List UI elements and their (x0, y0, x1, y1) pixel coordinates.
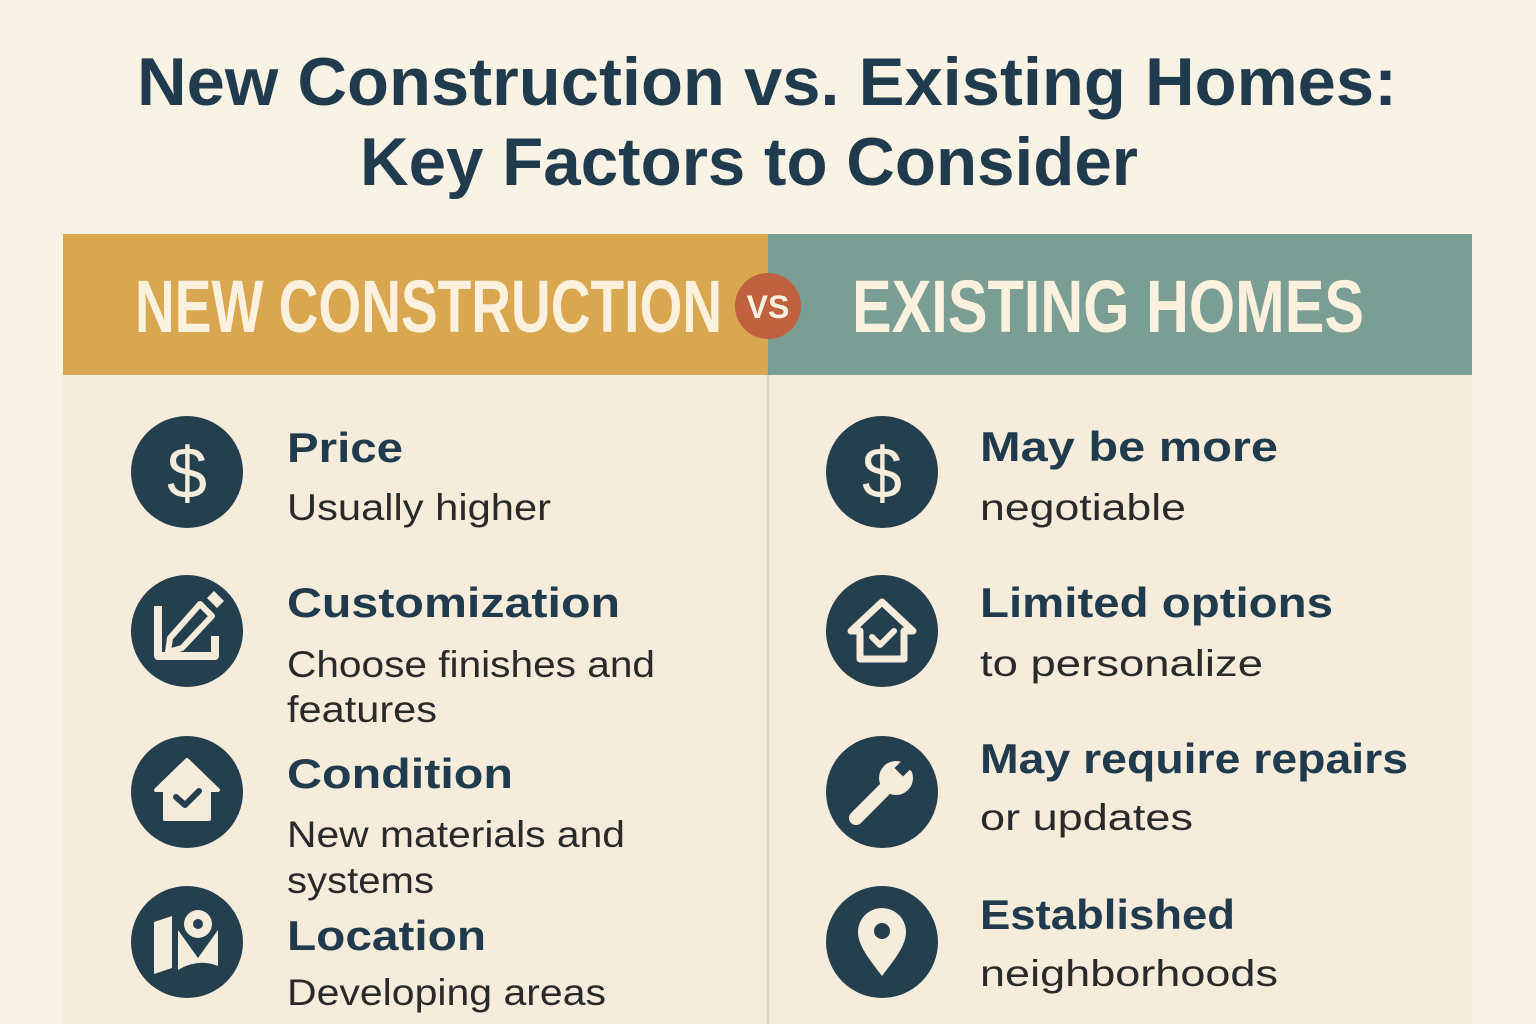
vs badge: VS (747, 289, 789, 325)
item: price: Usually higher (287, 487, 551, 528)
icon: wrench (826, 736, 938, 848)
header: existing homes (768, 234, 1472, 375)
item: location: Location (287, 912, 486, 959)
header: new construction (63, 234, 768, 375)
item: limited options (980, 579, 1333, 684)
icon: dollar left (131, 416, 243, 528)
title (137, 44, 1397, 200)
item: limited options: to personalize (980, 643, 1263, 684)
item: price: Price (287, 424, 403, 471)
item: condition (287, 750, 625, 901)
icon: edit (131, 575, 243, 687)
icon: map (131, 886, 243, 998)
header: existing homes: EXISTING HOMES (852, 265, 1364, 348)
item: repairs: May require repairs (980, 735, 1408, 782)
icon: house check left (131, 736, 243, 848)
item: condition: Condition (287, 750, 513, 797)
item: neighborhoods: neighborhoods (980, 953, 1278, 994)
item: repairs: or updates (980, 797, 1193, 838)
item: neighborhoods: Established (980, 891, 1235, 938)
item: negotiable: May be more (980, 423, 1278, 470)
icon: pin (826, 886, 938, 998)
panel: comparison body (63, 375, 1472, 1024)
icon: dollar right: $ (862, 434, 902, 514)
title: Key Factors to Consider (360, 124, 1138, 200)
item: customization: Choose finishes and (287, 644, 655, 685)
icon: house check right (826, 575, 938, 687)
item: price (287, 424, 551, 528)
title: New Construction vs. Existing Homes: (137, 44, 1397, 120)
item: repairs (980, 735, 1408, 838)
item: customization (287, 579, 655, 730)
vs badge (735, 273, 801, 339)
item: condition: systems (287, 860, 434, 901)
item: location (287, 912, 606, 1013)
item: negotiable (980, 423, 1278, 528)
icon: dollar left: $ (167, 434, 207, 514)
item: limited options: Limited options (980, 579, 1333, 626)
item: location: Developing areas (287, 972, 606, 1013)
item: neighborhoods (980, 891, 1278, 994)
header: new construction: NEW CONSTRUCTION (135, 265, 722, 348)
item: negotiable: negotiable (980, 487, 1186, 528)
icon: dollar right (826, 416, 938, 528)
item: customization: features (287, 689, 437, 730)
item: condition: New materials and (287, 814, 625, 855)
item: customization: Customization (287, 579, 620, 626)
